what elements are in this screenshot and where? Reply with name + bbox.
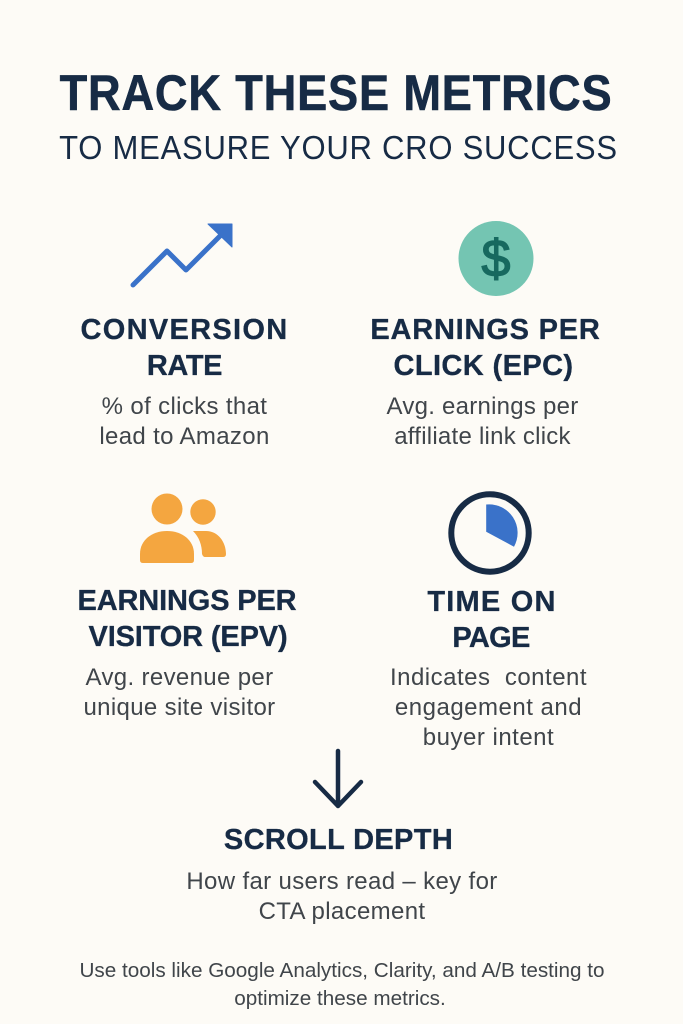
description: lead to Amazon <box>99 423 270 450</box>
heading: EARNINGS PER <box>370 314 601 346</box>
heading: VISITOR (EPV) <box>89 621 287 653</box>
icon: dollar coin <box>458 221 534 296</box>
description: buyer intent <box>423 724 554 751</box>
panel: conversion rate <box>80 224 288 450</box>
description: Avg. earnings per <box>387 393 578 420</box>
description: How far users read – key for <box>186 868 498 895</box>
icon: clock <box>448 491 532 575</box>
description: engagement and <box>395 694 582 721</box>
title: TRACK THESE METRICS <box>60 65 612 121</box>
description <box>390 664 587 751</box>
heading: TIME ON <box>427 586 557 618</box>
subtitle: TO MEASURE YOUR CRO SUCCESS <box>59 129 618 166</box>
icon: down arrow <box>312 748 364 808</box>
footer note: optimize these metrics. <box>234 987 446 1010</box>
icon: dollar coin: $ <box>482 230 511 288</box>
heading <box>427 586 557 654</box>
description: unique site visitor <box>83 694 276 721</box>
description <box>99 393 270 450</box>
heading <box>370 314 601 382</box>
description: CTA placement <box>259 898 425 925</box>
heading <box>80 314 288 382</box>
heading: RATE <box>147 350 222 382</box>
description <box>386 393 578 450</box>
description: affiliate link click <box>394 423 571 450</box>
icon: users <box>140 494 226 563</box>
description <box>83 664 276 721</box>
heading: PAGE <box>452 622 530 654</box>
heading: CONVERSION <box>80 314 288 346</box>
footer note <box>79 959 605 1010</box>
heading <box>78 585 296 653</box>
panel: earnings per visitor <box>78 494 296 721</box>
heading: SCROLL DEPTH <box>224 824 453 856</box>
description <box>186 868 498 925</box>
icon: trend arrow <box>130 224 232 288</box>
panel: earnings per click <box>370 221 601 450</box>
panel: scroll depth <box>186 824 498 925</box>
heading: EARNINGS PER <box>78 585 296 617</box>
description: % of clicks that <box>102 393 267 420</box>
description: Avg. revenue per <box>86 664 273 691</box>
panel: time on page <box>390 491 587 751</box>
footer note: Use tools like Google Analytics, Clarity, and A/B testing to <box>79 959 605 982</box>
heading: CLICK (EPC) <box>393 350 574 382</box>
description: Indicates content <box>390 664 587 691</box>
